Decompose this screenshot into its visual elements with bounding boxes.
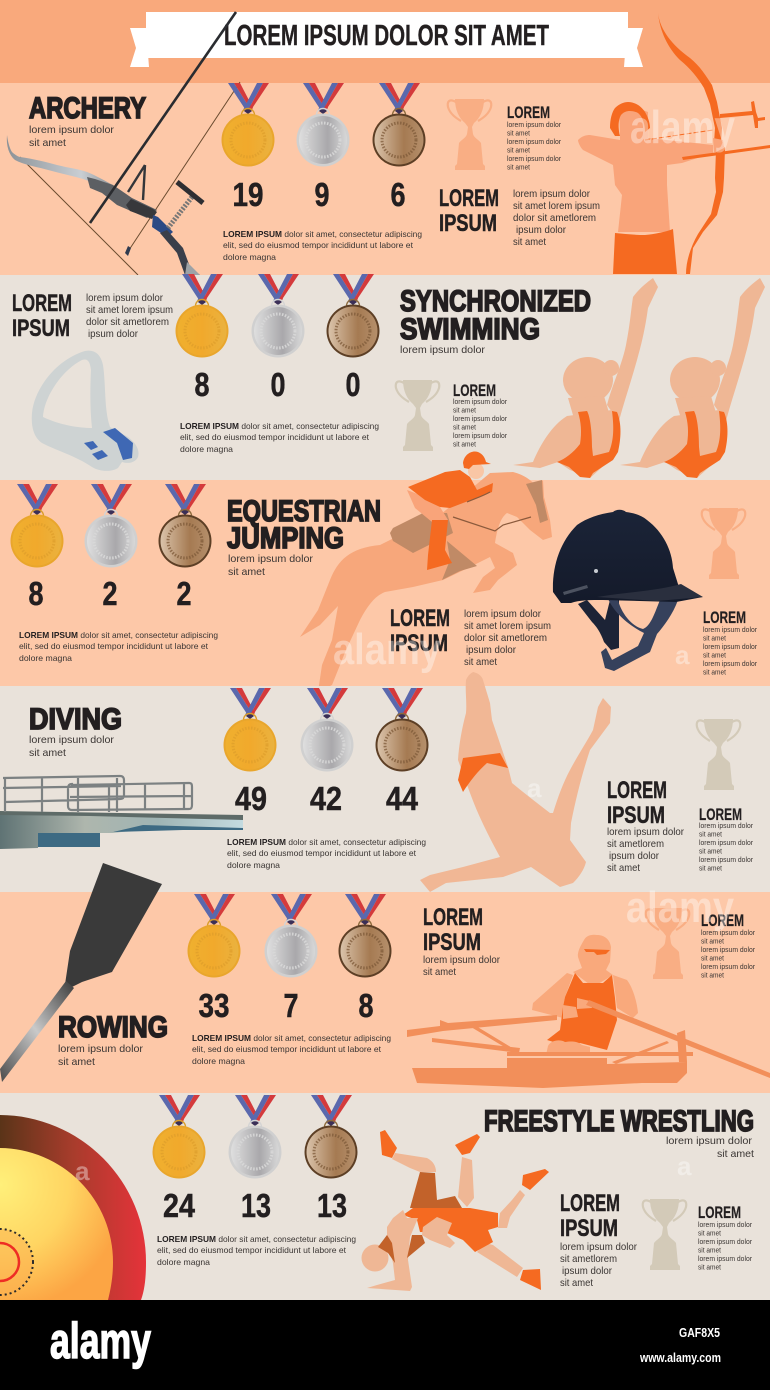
small text block: sit amet — [703, 652, 726, 660]
small text block: sit amet — [699, 866, 722, 872]
paragraph: dolore magna — [192, 1056, 245, 1066]
small text block — [507, 103, 562, 172]
panel: archery: sit amet — [29, 137, 66, 149]
medals with counts — [224, 688, 428, 817]
figure: archer — [578, 13, 770, 274]
large text block — [607, 777, 684, 874]
small text block: lorem ipsum dolor — [453, 433, 508, 440]
large text block: ipsum dolor — [516, 224, 566, 236]
icon: trophy — [396, 380, 439, 451]
paragraph: dolore magna — [223, 252, 276, 262]
icon: trophy — [702, 508, 745, 579]
small text block: lorem ipsum dolor — [699, 840, 754, 847]
small text block: sit amet — [453, 408, 476, 414]
heading: archery: ARCHERY — [29, 92, 146, 125]
small text block — [698, 1203, 753, 1272]
small text block: sit amet — [703, 636, 726, 642]
small text block: lorem ipsum dolor — [701, 947, 756, 954]
watermarks: alamy — [626, 883, 734, 932]
watermarks — [75, 101, 735, 1186]
small text block: LOREM — [703, 608, 746, 627]
paragraph: LOREM IPSUM dolor sit amet, consectetur adipiscing — [180, 421, 379, 431]
small text block: LOREM — [699, 805, 742, 824]
large text block — [560, 1190, 637, 1289]
small text block: lorem ipsum dolor — [701, 964, 756, 971]
watermarks: alamy — [333, 625, 441, 674]
paragraph — [227, 837, 426, 870]
small text block: sit amet — [701, 972, 724, 980]
small text block: lorem ipsum dolor — [453, 399, 508, 406]
panel: rowing — [0, 863, 770, 1093]
large text block — [12, 290, 173, 342]
heading: rowing: ROWING — [58, 1011, 168, 1044]
subtitle: lorem ipsum dolor — [29, 124, 115, 136]
medals with counts: 49 — [235, 780, 267, 817]
small text block: lorem ipsum dolor — [703, 661, 758, 668]
small text block: sit amet — [699, 832, 722, 838]
small text block: lorem ipsum dolor — [507, 139, 562, 146]
ribbon — [146, 12, 628, 58]
large text block: sit amet — [560, 1277, 593, 1289]
panel: archery — [0, 12, 770, 275]
heading: freestyle wrestling: sit amet — [717, 1148, 754, 1160]
footer bar — [0, 1300, 770, 1390]
paragraph — [192, 1033, 391, 1066]
medals with counts: 7 — [284, 987, 298, 1024]
panel: diving — [0, 672, 770, 892]
small text block: sit amet — [698, 1248, 721, 1254]
small text block: sit amet — [507, 148, 530, 154]
heading: synchronized swimming: SWIMMING — [400, 313, 540, 346]
medals with counts: 0 — [270, 366, 286, 403]
heading: equestrian jumping: JUMPING — [227, 522, 344, 555]
paragraph: LOREM IPSUM dolor sit amet, consectetur adipiscing — [19, 630, 218, 640]
paragraph: dolore magna — [180, 444, 233, 454]
large text block: IPSUM — [607, 802, 665, 829]
figure: horse and rider — [300, 452, 552, 692]
heading: synchronized swimming: SYNCHRONIZED — [400, 285, 591, 318]
large text block: lorem ipsum dolor — [423, 954, 500, 966]
medals with counts: 13 — [317, 1187, 347, 1224]
small text block: lorem ipsum dolor — [699, 857, 754, 864]
paragraph: LOREM IPSUM dolor sit amet, consectetur adipiscing — [192, 1033, 391, 1043]
heading: rowing: sit amet — [58, 1056, 95, 1068]
large text block: ipsum dolor — [562, 1265, 612, 1277]
paragraph: elit, sed do eiusmod tempor incididunt ut labore et — [227, 848, 417, 858]
paragraph: elit, sed do eiusmod tempor incididunt ut labore et — [157, 1245, 347, 1255]
icon: recurve bow — [7, 12, 240, 275]
large text block: sit amet — [464, 656, 497, 668]
title: LOREM IPSUM DOLOR SIT AMET — [224, 20, 549, 52]
small text block: sit amet — [698, 1264, 721, 1272]
large text block — [439, 185, 600, 248]
paragraph: elit, sed do eiusmod tempor incididunt ut labore et — [19, 641, 209, 651]
large text block: IPSUM — [12, 315, 70, 342]
medals with counts — [10, 484, 212, 612]
small text block: sit amet — [701, 938, 724, 946]
medals with counts — [176, 274, 380, 403]
large text block: LOREM — [12, 290, 72, 317]
medals with counts: 2 — [176, 575, 192, 612]
small text block: lorem ipsum dolor — [453, 416, 508, 423]
small text block: sit amet — [507, 164, 530, 172]
panel: equestrian jumping — [0, 452, 770, 692]
watermarks: a — [527, 773, 542, 803]
large text block: LOREM — [390, 605, 450, 632]
paragraph: LOREM IPSUM dolor sit amet, consectetur adipiscing — [227, 837, 426, 847]
large text block: sit amet — [513, 236, 546, 248]
small text block — [699, 805, 754, 872]
large text block: IPSUM — [390, 630, 448, 657]
medals with counts: 9 — [314, 176, 330, 213]
small text block: LOREM — [701, 911, 744, 930]
icon: oar — [0, 863, 162, 1082]
figure: rower in boat — [407, 935, 770, 1088]
paragraph: elit, sed do eiusmod tempor incididunt ut labore et — [223, 240, 414, 250]
small text block: lorem ipsum dolor — [703, 644, 758, 651]
footer logo: alamy — [50, 1313, 151, 1369]
paragraph: LOREM IPSUM dolor sit amet, consectetur adipiscing — [157, 1234, 356, 1244]
watermarks: a — [677, 1151, 692, 1181]
heading: diving — [29, 703, 122, 759]
medals with counts: 8 — [28, 575, 44, 612]
large text block: lorem ipsum dolor — [86, 292, 163, 304]
heading: synchronized swimming: lorem ipsum dolor — [400, 344, 486, 356]
heading: rowing — [58, 1011, 168, 1068]
heading: diving: DIVING — [29, 703, 122, 736]
medals with counts — [222, 83, 426, 213]
image id: GAF8X5 — [679, 1325, 720, 1340]
heading: equestrian jumping — [227, 495, 381, 578]
medals with counts: 24 — [163, 1187, 196, 1224]
paragraph: elit, sed do eiusmod tempor incididunt ut labore et — [192, 1044, 382, 1054]
paragraph — [223, 229, 422, 262]
paragraph — [19, 630, 218, 663]
medals with counts: 42 — [310, 780, 342, 817]
watermarks: a — [75, 1156, 90, 1186]
large text block: lorem ipsum dolor — [560, 1241, 637, 1253]
watermarks: a — [675, 640, 690, 670]
medals with counts: 8 — [358, 987, 374, 1024]
medals with counts — [152, 1095, 358, 1224]
small text block: lorem ipsum dolor — [698, 1239, 753, 1246]
large text block: dolor sit ametlorem — [464, 632, 547, 644]
medals with counts: 19 — [232, 176, 264, 213]
heading: diving: lorem ipsum dolor — [29, 734, 115, 746]
figure: wrestlers — [362, 1130, 549, 1291]
large text block — [390, 605, 551, 668]
large text block: sit amet lorem ipsum — [513, 200, 600, 212]
large text block: IPSUM — [423, 929, 481, 956]
heading: freestyle wrestling — [484, 1105, 754, 1160]
large text block: lorem ipsum dolor — [513, 188, 590, 200]
large text block: lorem ipsum dolor — [464, 608, 541, 620]
small text block: LOREM — [698, 1203, 741, 1222]
small text block: sit amet — [701, 956, 724, 962]
icon: trophy — [448, 99, 491, 170]
small text block: lorem ipsum dolor — [507, 122, 562, 129]
large text block: dolor sit ametlorem — [86, 316, 169, 328]
small text block: LOREM — [453, 381, 496, 400]
heading: equestrian jumping: EQUESTRIAN — [227, 495, 381, 528]
large text block: dolor sit ametlorem — [513, 212, 596, 224]
paragraph: dolore magna — [19, 653, 72, 663]
large text block: sit amet — [423, 966, 456, 978]
small text block: sit amet — [703, 670, 726, 676]
small text block — [453, 381, 508, 448]
icon: diving platform — [0, 776, 243, 849]
paragraph — [180, 421, 379, 454]
small text block: LOREM — [507, 103, 550, 122]
large text block: sit amet — [607, 862, 640, 874]
large text block: LOREM — [607, 777, 667, 804]
paragraph — [157, 1234, 356, 1267]
paragraph: dolore magna — [227, 860, 280, 870]
medals with counts: 6 — [390, 176, 406, 213]
medals with counts: 44 — [386, 780, 419, 817]
large text block — [423, 904, 500, 978]
heading: diving: sit amet — [29, 747, 66, 759]
small text block — [703, 608, 758, 676]
large text block: sit amet lorem ipsum — [86, 304, 173, 316]
small text block: sit amet — [507, 130, 530, 138]
medals with counts: 8 — [194, 366, 210, 403]
heading: rowing: lorem ipsum dolor — [58, 1043, 144, 1055]
small text block: lorem ipsum dolor — [701, 930, 756, 937]
large text block: ipsum dolor — [466, 644, 516, 656]
small text block: sit amet — [698, 1230, 721, 1238]
heading: equestrian jumping: lorem ipsum dolor — [228, 553, 314, 565]
large text block: IPSUM — [560, 1215, 618, 1242]
medals with counts: 13 — [241, 1187, 271, 1224]
large text block: lorem ipsum dolor — [607, 826, 684, 838]
heading: equestrian jumping: sit amet — [228, 566, 265, 578]
medals with counts: 0 — [346, 366, 360, 403]
header banner — [0, 0, 770, 83]
watermarks: alamy — [630, 101, 735, 153]
ribbon tails — [130, 28, 643, 67]
medals with counts: 2 — [102, 575, 118, 612]
medals with counts — [188, 894, 392, 1024]
figure: diver — [420, 672, 611, 892]
medals with counts: 33 — [198, 987, 230, 1024]
small text block: lorem ipsum dolor — [699, 823, 754, 830]
icon: trophy — [646, 908, 689, 979]
paragraph: LOREM IPSUM dolor sit amet, consectetur adipiscing — [223, 229, 422, 239]
heading: synchronized swimming — [400, 285, 591, 356]
small text block: lorem ipsum dolor — [698, 1256, 753, 1263]
small text block: sit amet — [453, 442, 476, 448]
small text block — [701, 911, 756, 980]
icon: riding helmet — [553, 510, 703, 671]
icon: target circle — [0, 1115, 146, 1300]
panel: freestyle wrestling — [0, 1093, 770, 1300]
large text block: sit amet lorem ipsum — [464, 620, 551, 632]
large text block: LOREM — [439, 185, 499, 212]
small text block: lorem ipsum dolor — [507, 156, 562, 163]
panel: synchronized swimming — [0, 274, 770, 480]
icon: trophy — [697, 719, 740, 790]
small text block: lorem ipsum dolor — [703, 627, 758, 634]
small text block: sit amet — [699, 848, 722, 856]
figure: swimmer two — [620, 278, 765, 478]
figure: swimmer one — [513, 278, 658, 478]
heading: freestyle wrestling: lorem ipsum dolor — [666, 1135, 753, 1147]
large text block: IPSUM — [439, 210, 497, 237]
icon: nose clip — [32, 351, 139, 471]
large text block: LOREM — [560, 1190, 620, 1217]
icon: trophy — [643, 1199, 686, 1270]
large text block: sit ametlorem — [607, 838, 664, 850]
large text block: LOREM — [423, 904, 483, 931]
paragraph: elit, sed do eiusmod tempor incididunt ut labore et — [180, 432, 370, 442]
paragraph: dolore magna — [157, 1257, 210, 1267]
small text block: lorem ipsum dolor — [698, 1222, 753, 1229]
large text block: ipsum dolor — [609, 850, 659, 862]
footer url: www.alamy.com — [639, 1350, 721, 1365]
small text block: sit amet — [453, 424, 476, 432]
large text block: ipsum dolor — [88, 328, 138, 340]
large text block: sit ametlorem — [560, 1253, 617, 1265]
